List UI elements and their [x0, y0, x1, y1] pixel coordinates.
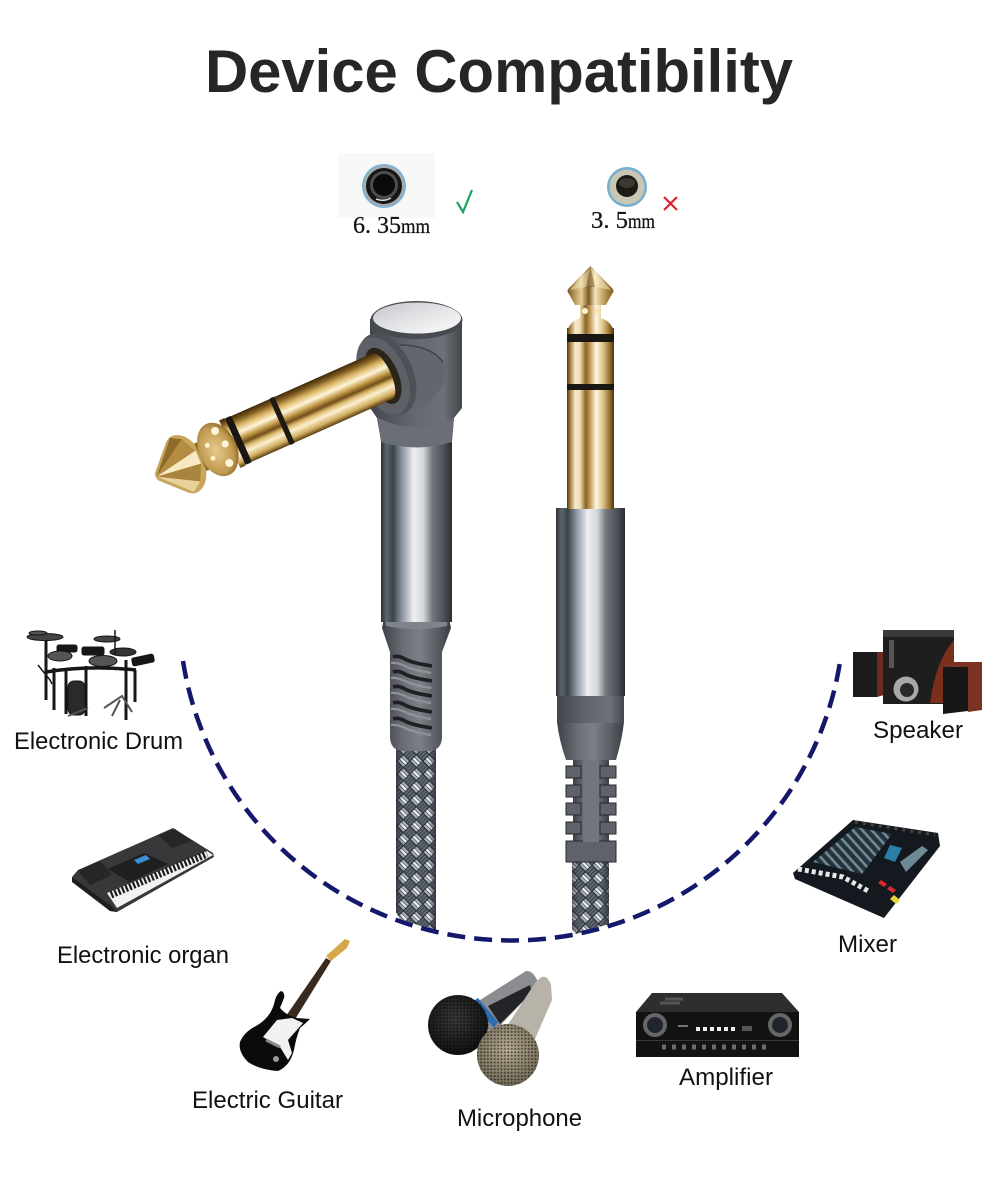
- device: mixer: [793, 820, 940, 958]
- braided cable: [572, 860, 609, 934]
- label: Mixer: [838, 931, 897, 958]
- icon: 3.5mm socket: [607, 167, 647, 207]
- label: Electronic organ: [57, 942, 229, 969]
- label: Electric Guitar: [192, 1087, 343, 1114]
- neck: [189, 439, 216, 473]
- metal barrel: [556, 508, 625, 696]
- right-angle plug and cable: [138, 301, 462, 931]
- strain relief: [382, 618, 451, 751]
- device: electronic organ: [57, 828, 229, 969]
- metal barrel: [381, 436, 452, 622]
- panel: 3.5mm socket incompatible: [591, 167, 677, 234]
- tip: [568, 266, 614, 305]
- device: electric guitar: [192, 939, 350, 1114]
- icon: mixer: [793, 820, 940, 918]
- icon: keyboard: [72, 828, 214, 912]
- label: 6.35mm: mm: [401, 214, 430, 238]
- housing tube bump: [400, 345, 445, 412]
- angled housing: [370, 301, 462, 448]
- device: speaker: [853, 630, 982, 744]
- icon: drum kit: [27, 630, 155, 720]
- label: Amplifier: [679, 1064, 773, 1091]
- icon: speaker set: [853, 630, 982, 714]
- dashed arc: [183, 661, 840, 940]
- label: Electronic Drum: [14, 728, 183, 755]
- label: 3.5mm: 3. 5: [591, 208, 628, 234]
- device: amplifier: [636, 993, 799, 1091]
- neck: [567, 304, 614, 334]
- label: Speaker: [873, 717, 963, 744]
- bulb: [189, 416, 247, 483]
- label: 3.5mm: mm: [628, 209, 655, 233]
- label: 6.35mm: [353, 213, 430, 239]
- label: 3.5mm: [591, 208, 655, 234]
- angled gold plug: [138, 324, 428, 516]
- gold shaft: [223, 353, 392, 465]
- device: microphone: [428, 971, 582, 1132]
- panel: 6.35mm socket compatible: [338, 153, 472, 239]
- icon: red cross: [664, 197, 677, 210]
- gold shaft: [567, 328, 614, 509]
- contact bands: [567, 334, 614, 342]
- label: 6.35mm: 6. 35: [353, 213, 401, 239]
- strain relief: [557, 722, 624, 862]
- icon: green check: [457, 190, 472, 212]
- tip: [143, 429, 213, 505]
- title: Device Compatibility: [205, 38, 794, 105]
- contact bands: [269, 396, 295, 445]
- icon: 6.35mm socket: [362, 164, 406, 208]
- straight plug and cable: [556, 266, 625, 934]
- device: electronic drum: [14, 630, 183, 755]
- label: Microphone: [457, 1105, 582, 1132]
- braided cable: [396, 745, 436, 931]
- collar ring: [346, 324, 428, 424]
- icon: amplifier: [636, 993, 799, 1057]
- gray collar: [557, 695, 624, 723]
- icon: guitar: [240, 939, 350, 1071]
- top cap: [373, 302, 461, 334]
- icon: microphones: [428, 971, 552, 1086]
